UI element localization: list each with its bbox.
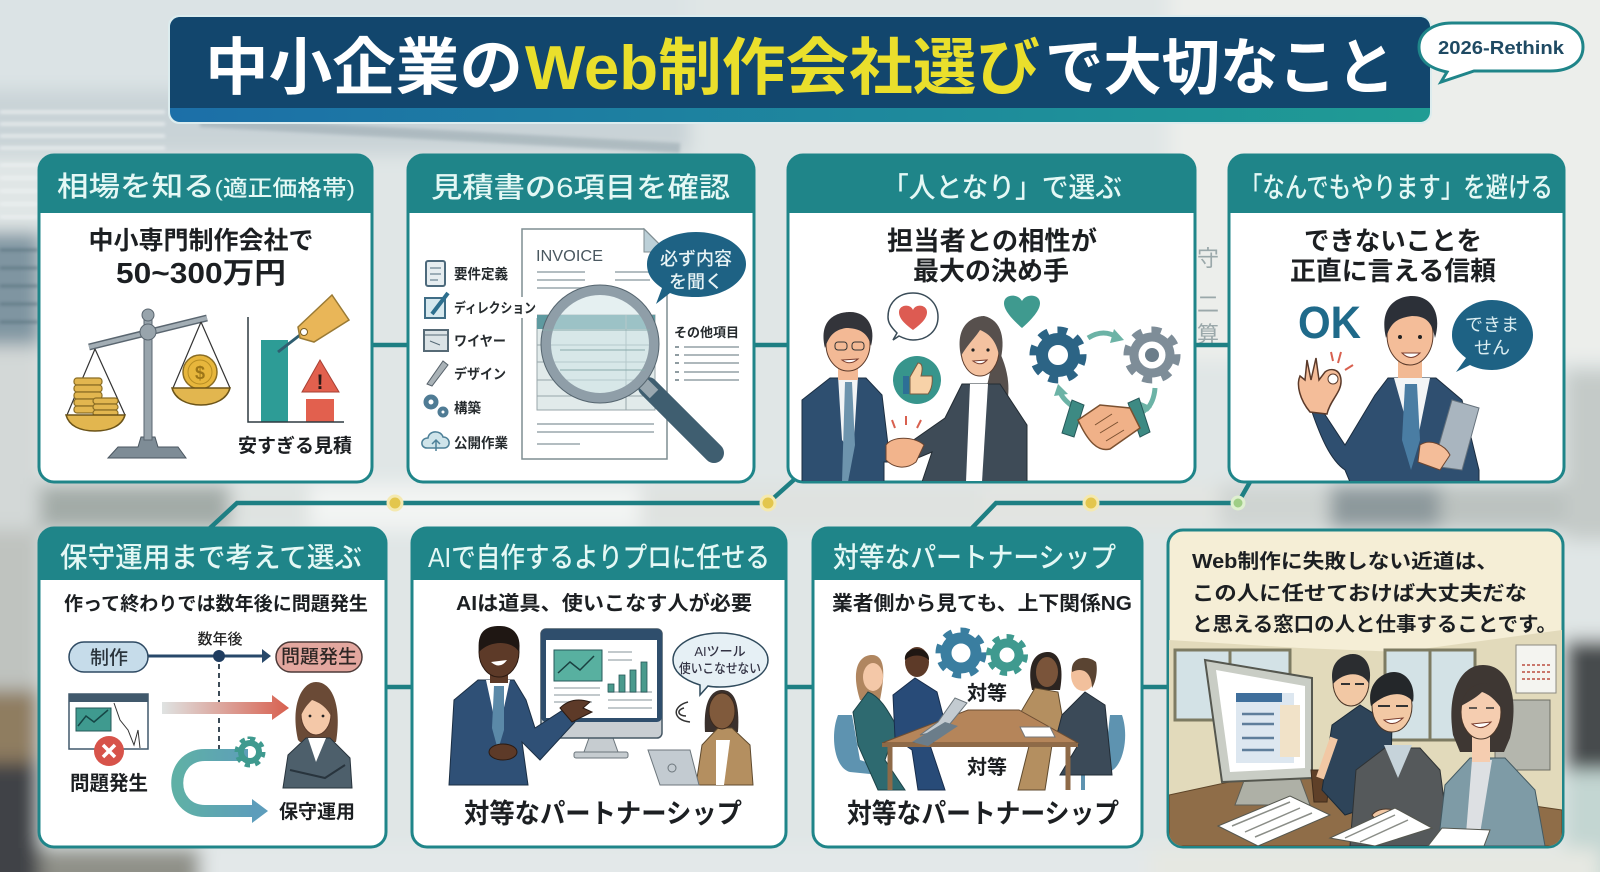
- paper stacks: [1218, 796, 1490, 846]
- timeline: [69, 631, 362, 750]
- badge: 2026-Rethink: [1419, 23, 1583, 82]
- person third: [1030, 652, 1062, 690]
- panel: 保守運用まで考えて選ぶ: [39, 528, 386, 847]
- clipboard: [1433, 400, 1479, 470]
- arrow: maintenance loop: [177, 739, 268, 823]
- icon: thumbs up: [893, 356, 941, 404]
- item: デザイン: [427, 361, 506, 386]
- office wall and windows: [1169, 630, 1562, 846]
- woman: [902, 316, 1027, 482]
- monitor: [1205, 660, 1312, 805]
- heading: 見積書の6項目を確認: [431, 172, 730, 203]
- subheading: できないことを: [1304, 226, 1482, 256]
- person fourth: [1056, 692, 1112, 775]
- icon: magnifying glass: [541, 285, 714, 453]
- blue gear: [1033, 330, 1083, 380]
- item: 公開作業: [422, 432, 508, 451]
- icon: heart speech bubble: [888, 293, 938, 340]
- label: 対等 bottom: 対等: [967, 756, 1007, 779]
- message text: Web制作に失敗しない近道は、: [1192, 550, 1498, 573]
- pill: 問題発生: [276, 642, 362, 672]
- chart: too-cheap estimate bars: !: [316, 371, 324, 394]
- panel: 相場を知る: [39, 155, 372, 482]
- item: 構築: [426, 397, 481, 416]
- icon: monitor with chart: [541, 629, 662, 758]
- item: ワイヤー: ワイヤー: [454, 333, 506, 349]
- callout: 必ず内容を聞く: 必ず内容: [660, 249, 732, 269]
- item: デザイン: デザイン: [454, 366, 506, 382]
- chart: too-cheap estimate bars: [248, 295, 349, 422]
- subheading: 最大の決め手: [913, 256, 1069, 286]
- panel: 対等なパートナーシップ: [813, 528, 1142, 847]
- icon: OK hand gesture: [1298, 352, 1353, 414]
- subheading: [88, 227, 314, 290]
- illustration: woman with laptop: [648, 690, 753, 785]
- icon: confusion scribble: [676, 702, 690, 722]
- calendar: [1516, 645, 1556, 693]
- item: 構築: 構築: [454, 400, 481, 416]
- arrow: problem arrow: [162, 695, 289, 720]
- icon: balance scale: [66, 309, 230, 458]
- desk: [1169, 779, 1562, 846]
- item: ディレクション: ディレクション: [454, 300, 536, 316]
- title text: 中小企業の: [205, 34, 523, 103]
- back equipment: [1495, 700, 1550, 770]
- invoice document: INVOICE: [536, 248, 603, 265]
- callout: できません: せん: [1474, 338, 1510, 358]
- heading: 対等なパートナーシップ: [833, 542, 1116, 573]
- handshake: [886, 438, 924, 467]
- item: 要件定義: 要件定義: [454, 266, 508, 282]
- subheading: [1290, 226, 1496, 286]
- item: ディレクション: [425, 293, 537, 318]
- coffee cup: [1311, 770, 1330, 802]
- label: 問題発生: 問題発生: [70, 772, 148, 795]
- background signage fragment: [1197, 246, 1219, 347]
- panel: なんでもやりますを避ける: [1229, 155, 1564, 482]
- icon: balance scale: $: [195, 363, 205, 383]
- heading: 「人となり」で選ぶ: [882, 172, 1122, 203]
- background signage fragment: 算: [1197, 322, 1219, 347]
- icon: gear: [237, 739, 263, 765]
- panel: 人となりで選ぶ: [788, 155, 1195, 482]
- subheading: 作って終わりでは数年後に問題発生: [64, 592, 368, 615]
- badge: 2026-Rethink: 2026-Rethink: [1438, 38, 1565, 58]
- connector node 3: [1084, 496, 1098, 510]
- panel: AIで自作するよりプロに任せる: [412, 528, 786, 847]
- message text: と思える窓口の人と仕事することです。: [1192, 613, 1557, 636]
- connector node 2: [761, 496, 775, 510]
- icon: gears cycle: [1033, 329, 1177, 450]
- connector lines between panels: [210, 345, 1250, 687]
- icon: sparkle marks: [892, 416, 921, 428]
- person second: [893, 678, 948, 790]
- callout: AIツール使いこなせない: AIツール: [694, 644, 746, 659]
- caption: 安すぎる見積: [238, 434, 352, 457]
- icon: broken browser: [69, 694, 148, 766]
- message text: [1192, 550, 1557, 636]
- subheading: 業者側から見ても、上下関係NG: [832, 592, 1132, 615]
- subheading: 50~300万円: [116, 258, 286, 290]
- laptop: [920, 698, 967, 735]
- pill: 問題発生: 問題発生: [281, 646, 357, 668]
- OK label: OK: [1298, 297, 1361, 348]
- icon: price tag: [278, 295, 349, 352]
- その他項目 list: [674, 325, 739, 380]
- man standing: [1320, 654, 1392, 815]
- timeline: 数年後: [197, 631, 243, 648]
- その他項目 list: その他項目: [674, 325, 739, 340]
- callout: 必ず内容を聞く: を聞く: [669, 272, 723, 292]
- table: [882, 710, 1078, 743]
- 6-item list: [422, 261, 537, 451]
- handshake icon: [1062, 398, 1150, 450]
- illustration: man with OK sign: [1312, 296, 1479, 482]
- item: 公開作業: 公開作業: [454, 435, 508, 451]
- pill: 制作: [69, 642, 148, 672]
- background signage fragment: 守: [1197, 246, 1219, 271]
- connector node 1: [388, 496, 402, 510]
- illustration: woman arms folded: [283, 682, 352, 788]
- callout: AIツール使いこなせない: [673, 633, 768, 695]
- title text: [205, 34, 1395, 103]
- bottom caption: 対等なパートナーシップ: [847, 799, 1119, 829]
- heading: 相場を知る (適正価格帯): [57, 171, 355, 202]
- panel: 見積書の6項目: [408, 155, 754, 482]
- callout: 必ず内容を聞く: [647, 232, 746, 304]
- background signage fragment: 二: [1197, 292, 1219, 317]
- subheading: AIは道具、使いこなす人が必要: [456, 591, 752, 615]
- illustration: man and woman shaking hands: [802, 312, 1027, 482]
- icon: meshing gears: [939, 631, 1025, 675]
- subheading: 中小専門制作会社で: [88, 227, 314, 255]
- label: 保守運用: 保守運用: [279, 801, 355, 823]
- item: 要件定義: [426, 261, 508, 286]
- title text: Web制作会社選び: [525, 34, 1040, 103]
- connector node 4: [1232, 497, 1244, 509]
- man in sweater: [1350, 672, 1450, 846]
- icon: teal heart: [1004, 296, 1040, 328]
- pill: 制作: 制作: [90, 647, 128, 669]
- message text: この人に任せておけば大丈夫だな: [1192, 582, 1527, 605]
- item: ワイヤー: [424, 330, 506, 351]
- title text: で大切なこと: [1045, 34, 1395, 103]
- illustration: presenter: [449, 626, 592, 785]
- title banner: [168, 15, 1432, 124]
- heading: 保守運用まで考えて選ぶ: [60, 542, 362, 573]
- grey gear: [1127, 330, 1177, 380]
- woman: [1438, 665, 1545, 846]
- subheading: 担当者との相性が: [887, 226, 1097, 256]
- bottom caption: 対等なパートナーシップ: [464, 799, 742, 829]
- callout: AIツール使いこなせない: 使いこなせない: [679, 661, 761, 676]
- illustration: office team at monitor: [1169, 630, 1562, 846]
- subheading: 正直に言える信頼: [1290, 256, 1496, 286]
- callout: できません: できま: [1465, 315, 1519, 335]
- man: [802, 312, 888, 481]
- person left: [856, 655, 883, 700]
- chairs: [834, 715, 1125, 790]
- heading: AIで自作するよりプロに任せる: [428, 542, 770, 573]
- label: 対等 top: 対等: [967, 682, 1007, 705]
- subheading: [887, 226, 1097, 286]
- callout: できません: [1452, 300, 1533, 372]
- illustration: four people at table: [834, 647, 1125, 790]
- invoice document: [522, 229, 667, 459]
- panel: takeaway message with team illustration: [1168, 530, 1563, 847]
